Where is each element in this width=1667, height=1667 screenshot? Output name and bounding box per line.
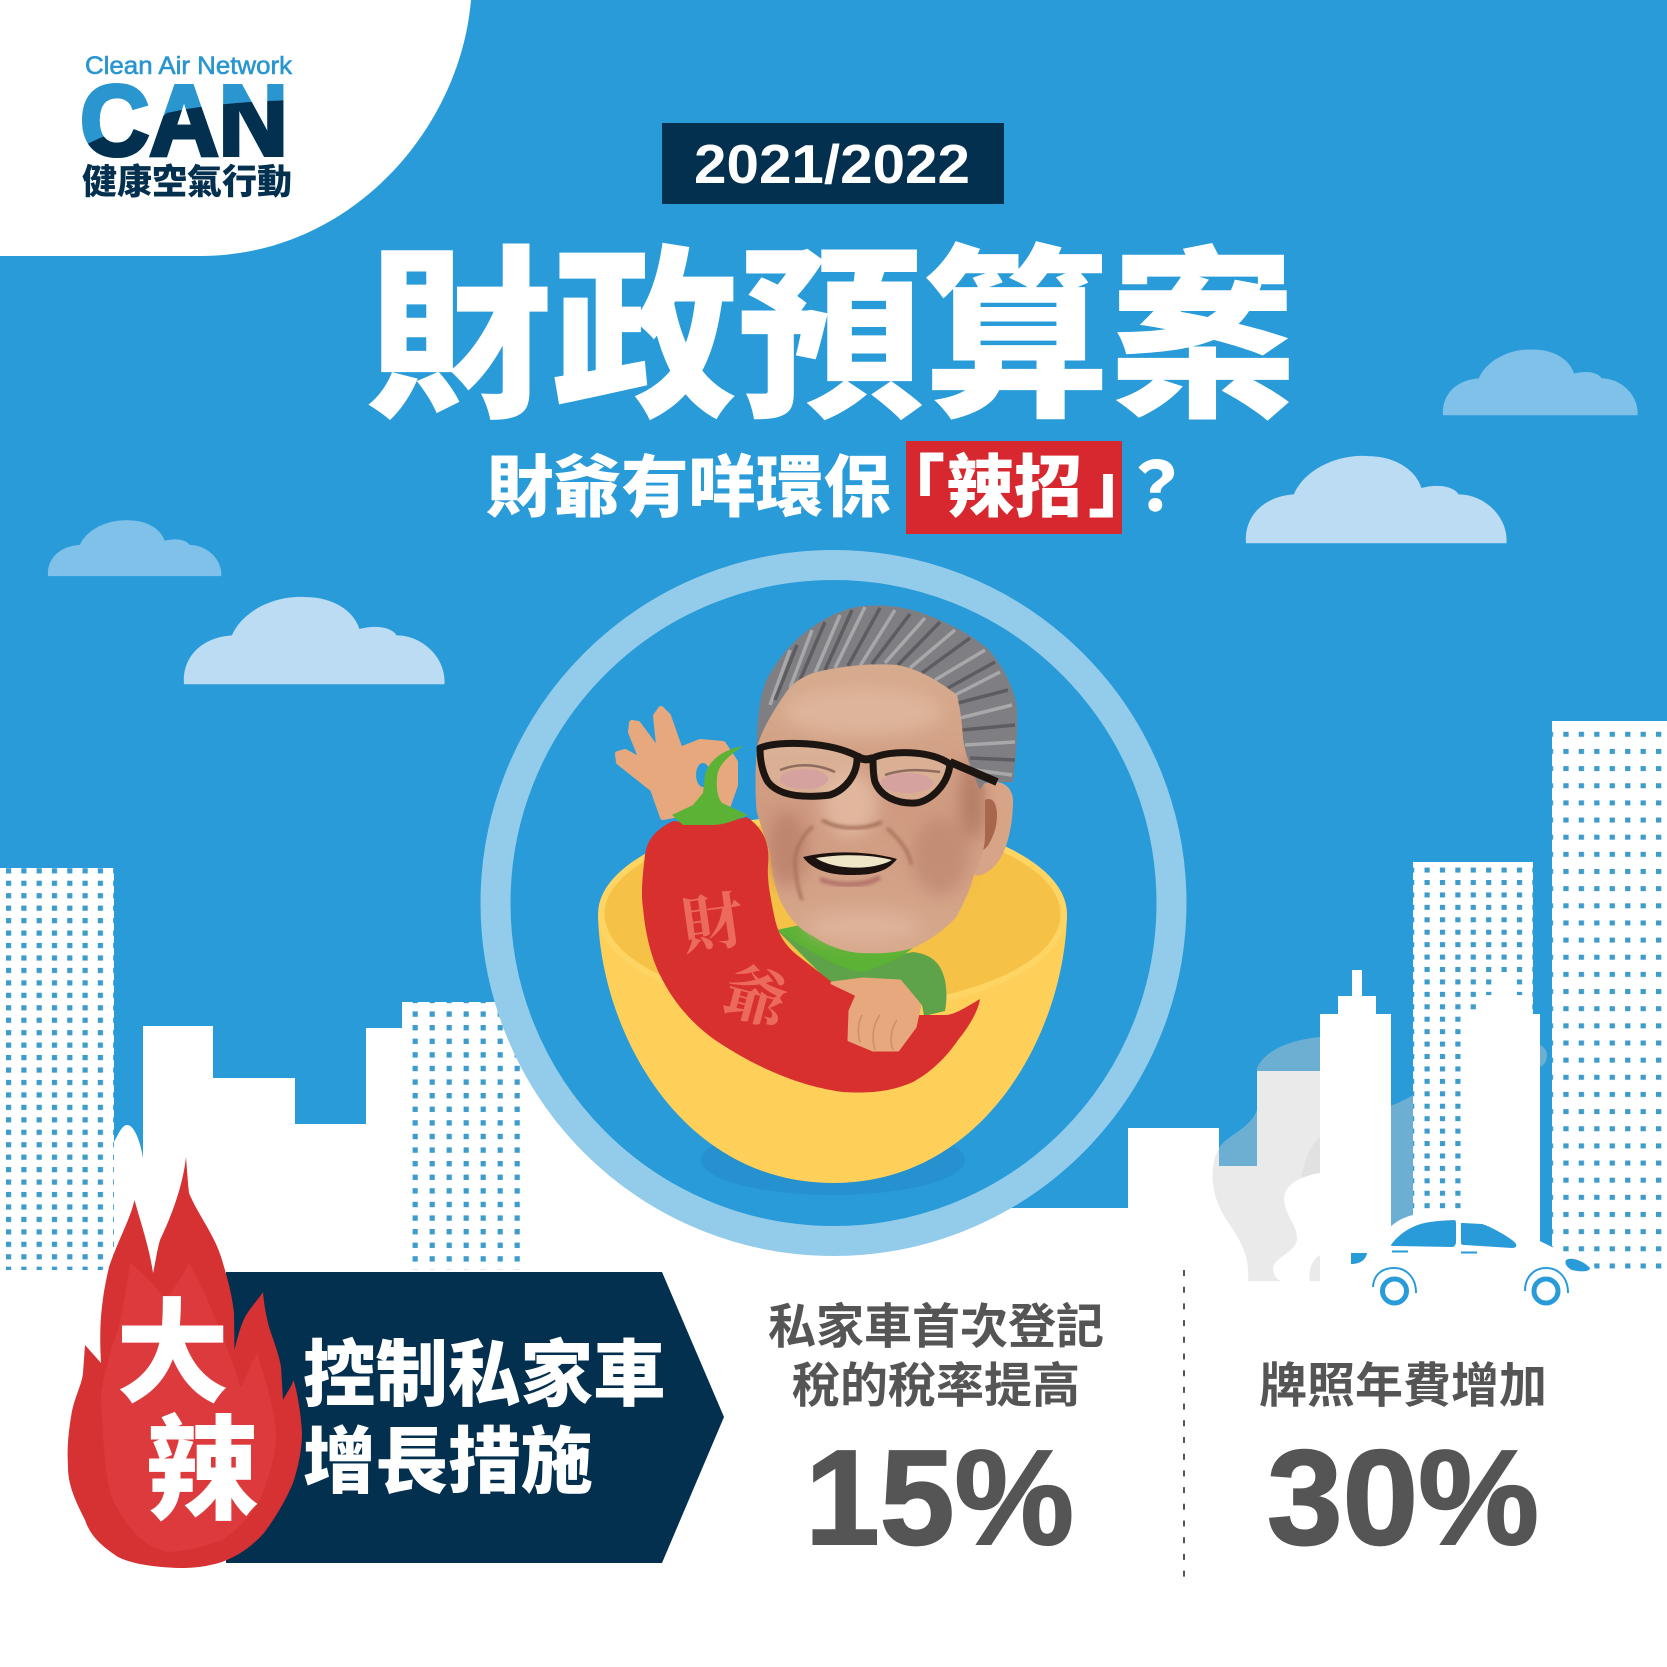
stat: first registration tax [768, 1301, 1104, 1573]
chili stem [672, 746, 748, 825]
car lights [1351, 1253, 1590, 1271]
stat: first registration tax: 私家車首次登記 [768, 1301, 1104, 1354]
stat: first registration tax: 稅的稅率提高 [792, 1360, 1080, 1413]
finger gap [696, 763, 710, 787]
bowl [598, 814, 1067, 1183]
year badge: 2021/2022 [694, 133, 970, 195]
left skyline [0, 868, 700, 1270]
subtitle: ？ [1122, 450, 1190, 526]
mouth [803, 852, 897, 884]
subtitle: 」 [1088, 450, 1156, 526]
hair [757, 605, 1017, 790]
nose [822, 820, 882, 828]
white tower [1320, 970, 1391, 1281]
car door lines [1392, 1252, 1477, 1253]
banner [226, 1272, 724, 1563]
smile folds [795, 826, 911, 900]
banner text: 控制私家車 [303, 1335, 666, 1416]
portrait head [756, 605, 1017, 953]
face [756, 640, 985, 953]
right skyline with smoke [700, 721, 1667, 1281]
clouds [48, 349, 1638, 684]
chili [642, 746, 980, 1093]
subtitle: 「 [877, 450, 945, 526]
lower hand [832, 979, 920, 1050]
facial shading [767, 688, 984, 942]
wheels [1373, 1268, 1568, 1303]
flame character 大: 大 [116, 1291, 229, 1417]
logo: CAN wordmark [82, 83, 284, 158]
flame [68, 1157, 302, 1568]
dashed divider [1183, 1270, 1185, 1580]
banner text [303, 1335, 666, 1503]
car windows [1391, 1220, 1516, 1248]
logo: CAN wordmark: CAN [80, 65, 288, 177]
chili label 財: 財 [677, 887, 748, 963]
stat: licence fee: 30% [1267, 1422, 1539, 1573]
banner text: 增長措施 [303, 1422, 593, 1503]
subtitle [486, 441, 1190, 534]
year badge [662, 123, 1004, 204]
logo panel [0, 0, 471, 256]
stat: licence fee: 牌照年費增加 [1259, 1360, 1547, 1413]
smoke [1213, 1037, 1547, 1281]
dotted mid tower [1413, 862, 1540, 1247]
flame character 辣: 辣 [145, 1408, 258, 1534]
car [1330, 1212, 1600, 1303]
subtitle: 財爺有咩環保 [486, 451, 891, 526]
logo: Clean Air Network: Clean Air Network [85, 52, 293, 80]
main title: 財政預算案 [366, 235, 1296, 442]
stat: first registration tax: 15% [805, 1422, 1074, 1573]
subtitle: 辣招 [946, 450, 1082, 526]
illustration: chili in bowl [598, 605, 1067, 1195]
closed eyes [780, 765, 940, 793]
glasses [760, 743, 997, 803]
bowl shadow [701, 1125, 965, 1195]
chili label 爺: 爺 [716, 957, 794, 1039]
stat: licence fee [1259, 1360, 1547, 1573]
upper hand [618, 709, 735, 817]
central circle [496, 565, 1172, 1241]
logo: Chinese name: 健康空氣行動 [82, 163, 292, 202]
flame inner highlight [101, 1263, 276, 1552]
ear [968, 782, 1013, 875]
ground [0, 1270, 1667, 1667]
logo: CAN wordmark: CAN [80, 65, 288, 177]
shirt [777, 925, 946, 1016]
